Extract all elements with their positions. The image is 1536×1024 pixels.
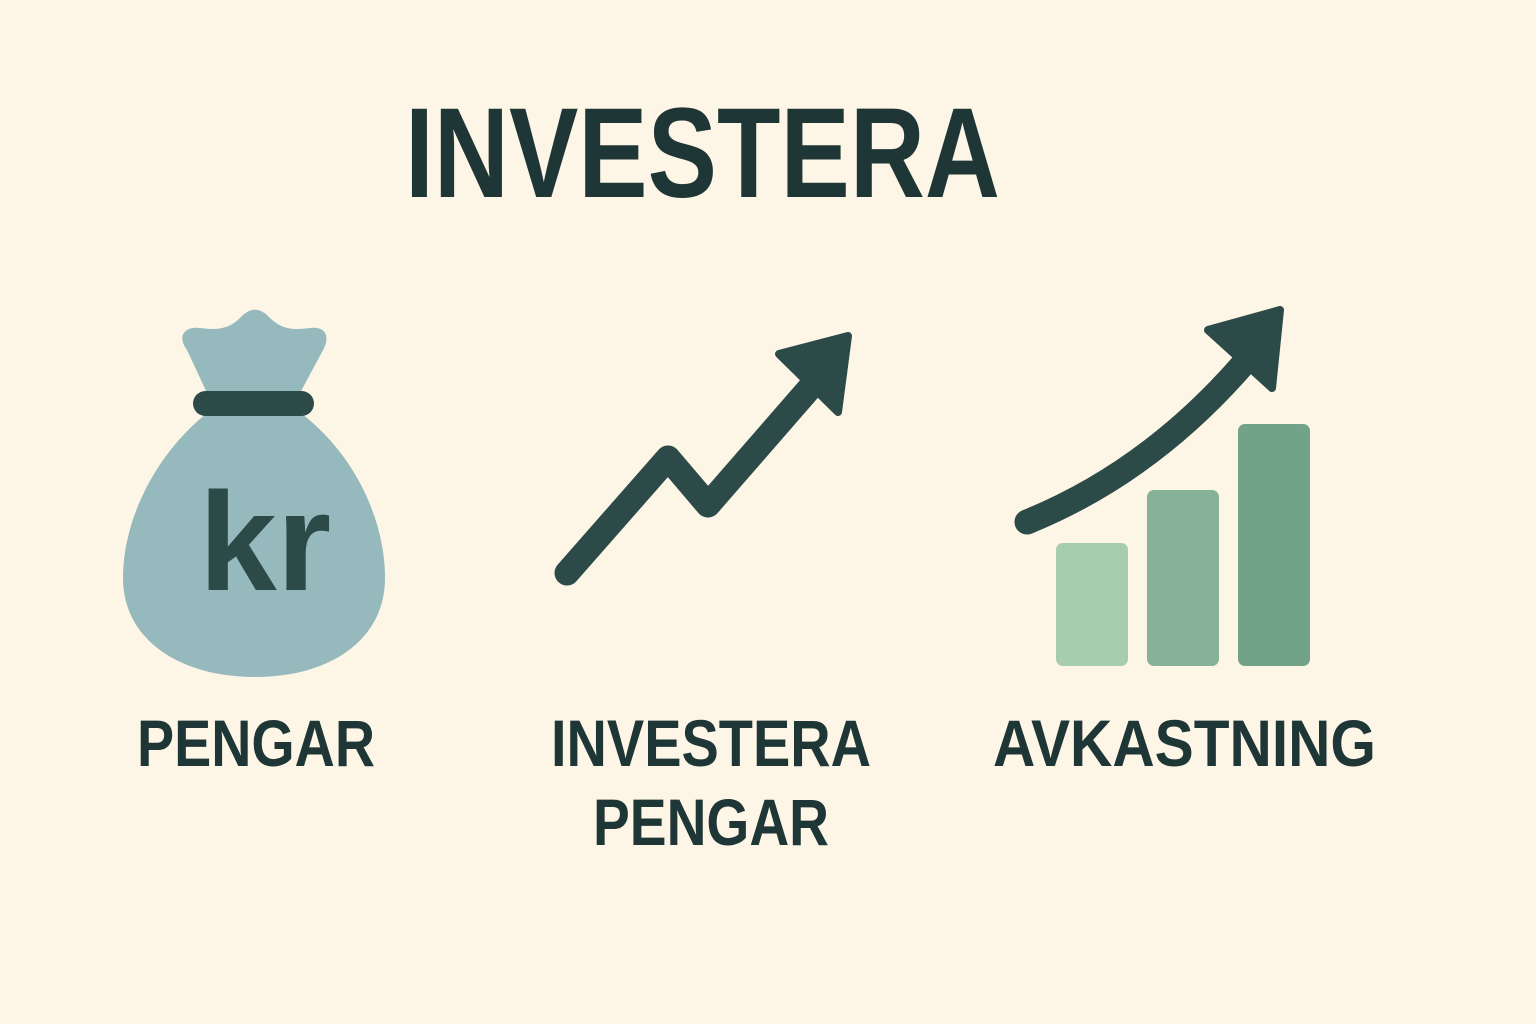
icon: bar chart with rising arrow: [1027, 310, 1310, 666]
label: investera pengar: INVESTERA: [551, 706, 871, 780]
title: INVESTERA: [405, 82, 1000, 225]
label: pengar: PENGAR: [137, 706, 375, 780]
icon: money bag: kr: [199, 463, 331, 620]
label: avkastning: AVKASTNING: [993, 706, 1376, 780]
label: investera pengar: PENGAR: [593, 785, 829, 859]
icon: zigzag arrow: [567, 336, 848, 573]
icon: money bag: [123, 310, 385, 677]
label: investera pengar: [551, 706, 871, 859]
